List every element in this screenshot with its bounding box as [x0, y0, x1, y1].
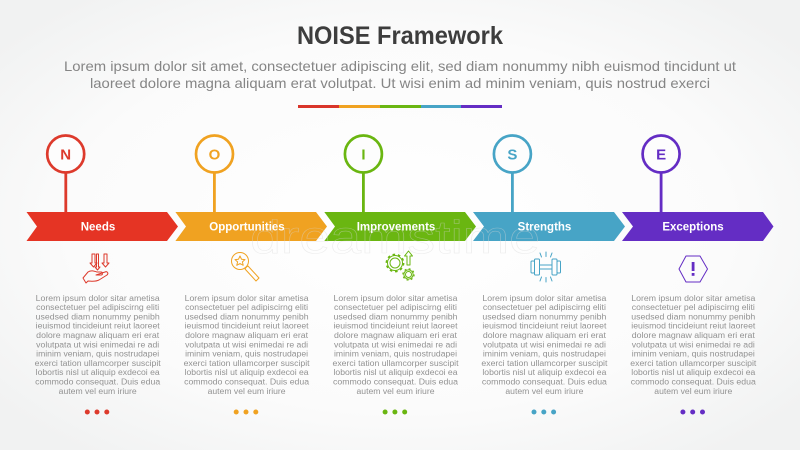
subtitle text — [64, 58, 736, 91]
text block: opportunities: ieuismod tincideiunt reiut laoreet — [185, 322, 309, 331]
icon: magnifier with star — [232, 252, 259, 281]
dots: opportunities — [234, 410, 258, 414]
text block: opportunities: consectetuer pel adipiscirng eliti — [185, 303, 308, 312]
text block: strengths: usedsed diam nonummy penibh — [482, 312, 606, 321]
subtitle text: laoreet dolore magna aliquam erat volutpat. Ut wisi enim ad minim veniam, quis nostrud exerci — [90, 75, 710, 91]
text block: improvements: ieuismod tincideiunt reiut laoreet — [334, 322, 458, 331]
text block: strengths: commodo consequat. Duis edua — [482, 378, 608, 386]
text block: improvements: iminim veniam, quis nostrudapei — [334, 350, 457, 359]
text block: improvements: volutpata ut wisi enimedai re adi — [334, 340, 457, 349]
text block: exceptions: consectetuer pel adipiscirng eliti — [632, 303, 755, 312]
text block: strengths: autem vel eum iriure — [505, 387, 584, 396]
text block: needs: lobortis nisl ut aliquip exdecoi ea — [36, 368, 160, 377]
step N: pin and arrow: N — [60, 146, 71, 164]
text block: exceptions: Lorem ipsum dolor sitar ametisa — [631, 294, 756, 303]
text block: improvements: exerci tation ullamcorper suscipit — [332, 359, 459, 368]
text block: needs: iminim veniam, quis nostrudapei — [36, 350, 159, 359]
step I: pin and arrow: Improvements — [357, 222, 435, 234]
text block: exceptions: iminim veniam, quis nostrudapei — [632, 350, 755, 359]
text block: needs: volutpata ut wisi enimedai re adi — [36, 340, 159, 349]
dots: improvements — [383, 410, 407, 414]
text block: exceptions: commodo consequat. Duis edua — [631, 378, 756, 386]
text block: opportunities: volutpata ut wisi enimedai re adi — [185, 340, 308, 349]
text block: exceptions: volutpata ut wisi enimedai re adi — [632, 340, 755, 349]
text block: improvements: consectetuer pel adipiscirng eliti — [334, 303, 457, 312]
text block: strengths: iminim veniam, quis nostrudapei — [483, 350, 606, 359]
text block: exceptions: ieuismod tincideiunt reiut laoreet — [631, 322, 756, 331]
text block: needs: ieuismod tincideiunt reiut laoreet — [36, 322, 161, 331]
text block: needs: dolore magnaw aliquam eri erat — [36, 331, 160, 340]
text block: opportunities: Lorem ipsum dolor sitar ametisa — [185, 294, 309, 303]
text block: strengths: lobortis nisl ut aliquip exdecoi ea — [482, 368, 607, 377]
step N: pin and arrow: Needs — [81, 222, 115, 234]
text block: opportunities — [184, 294, 310, 396]
text block: exceptions — [630, 294, 757, 396]
step E: pin and arrow — [622, 136, 774, 241]
step E: pin and arrow: Exceptions — [662, 222, 724, 234]
step E: pin and arrow: E — [656, 146, 666, 164]
step I: pin and arrow — [324, 136, 476, 241]
colour divider bar — [298, 105, 502, 108]
icon: dumbbell — [531, 252, 560, 282]
text block: exceptions: autem vel eum iriure — [654, 387, 733, 396]
text block: needs: autem vel eum iriure — [59, 387, 137, 396]
watermark: dreamstime — [250, 211, 540, 263]
subtitle text: Lorem ipsum dolor sit amet, consectetuer adipiscing elit, sed diam nonummy nibh euismod tincidunt ut — [64, 58, 736, 74]
text block: improvements: usedsed diam nonummy penibh — [334, 312, 458, 321]
step I: pin and arrow: I — [361, 146, 365, 164]
icon: hand with down arrows — [83, 254, 109, 283]
text block: needs: usedsed diam nonummy penibh — [36, 312, 160, 321]
text block: opportunities: autem vel eum iriure — [208, 387, 286, 396]
text block: opportunities: exerci tation ullamcorper suscipit — [184, 359, 310, 368]
text block: needs: consectetuer pel adipiscirng eliti — [36, 303, 159, 312]
step S: pin and arrow: Strengths — [518, 222, 571, 234]
text block: improvements: dolore magnaw aliquam eri erat — [334, 331, 458, 340]
text block: improvements: lobortis nisl ut aliquip exdecoi ea — [334, 368, 458, 377]
icon: hexagon exclamation — [679, 256, 708, 282]
title: NOISE Framework — [297, 22, 503, 50]
step O: pin and arrow: O — [209, 146, 221, 164]
text block: strengths: consectetuer pel adipiscirng eliti — [483, 303, 606, 312]
text block: needs: Lorem ipsum dolor sitar ametisa — [36, 294, 160, 303]
step O: pin and arrow — [175, 136, 327, 241]
text block: opportunities: commodo consequat. Duis edua — [184, 378, 310, 386]
text block: improvements: Lorem ipsum dolor sitar ametisa — [334, 294, 458, 303]
step N: pin and arrow — [26, 136, 178, 241]
text block: opportunities: lobortis nisl ut aliquip exdecoi ea — [185, 368, 309, 377]
dots: exceptions — [680, 410, 705, 414]
text block: improvements — [332, 294, 459, 396]
dots: needs — [85, 410, 109, 414]
text block: opportunities: dolore magnaw aliquam eri erat — [185, 331, 309, 340]
text block: strengths — [481, 294, 608, 396]
text block: needs: exerci tation ullamcorper suscipit — [35, 359, 162, 368]
step S: pin and arrow: S — [507, 146, 517, 164]
dots: strengths — [532, 410, 556, 414]
text block: opportunities: iminim veniam, quis nostrudapei — [185, 350, 308, 359]
text block: needs: commodo consequat. Duis edua — [35, 378, 161, 386]
text block: strengths: dolore magnaw aliquam eri erat — [483, 331, 607, 340]
text block: strengths: volutpata ut wisi enimedai re adi — [483, 340, 606, 349]
text block: improvements: autem vel eum iriure — [356, 387, 435, 396]
icon: gears with up arrow — [386, 251, 414, 280]
step S: pin and arrow — [473, 136, 625, 241]
text block: strengths: Lorem ipsum dolor sitar ametisa — [482, 294, 607, 303]
text block: exceptions: dolore magnaw aliquam eri erat — [632, 331, 756, 340]
text block: exceptions: usedsed diam nonummy penibh — [631, 312, 755, 321]
text block: exceptions: lobortis nisl ut aliquip exdecoi ea — [631, 368, 756, 377]
step O: pin and arrow: Opportunities — [209, 222, 285, 234]
text block: opportunities: usedsed diam nonummy penibh — [185, 312, 309, 321]
text block: strengths: ieuismod tincideiunt reiut laoreet — [482, 322, 607, 331]
text block: improvements: commodo consequat. Duis edua — [333, 378, 459, 386]
text block: exceptions: exerci tation ullamcorper suscipit — [630, 359, 757, 368]
text block: needs — [35, 294, 162, 396]
text block: strengths: exerci tation ullamcorper suscipit — [481, 359, 608, 368]
